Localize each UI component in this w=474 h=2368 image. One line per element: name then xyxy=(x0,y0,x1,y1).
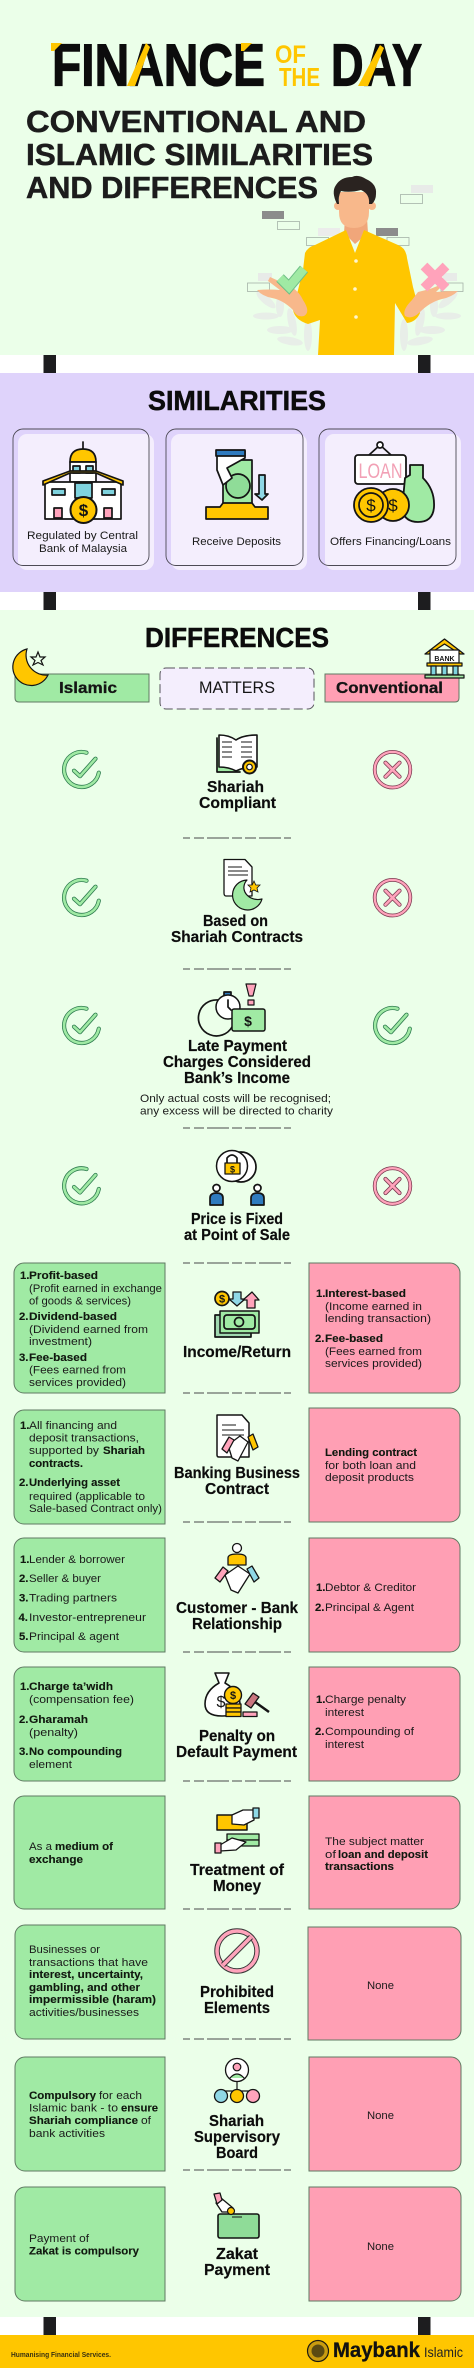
conventional cross xyxy=(375,880,410,916)
card: offers financing and loans: $ xyxy=(366,496,376,515)
icon: padlock in speech bubbles and two people xyxy=(210,1150,264,1205)
row: Late Payment Charges xyxy=(64,984,410,1118)
conventional panel: (Fees earned from xyxy=(325,1346,422,1358)
islamic panel: Investor-entrepreneur xyxy=(29,1612,146,1624)
column header: Islamic xyxy=(15,674,149,702)
label xyxy=(199,779,277,812)
main heading: AND DIFFERENCES xyxy=(26,170,318,205)
row: Banking Business Contract xyxy=(14,1408,460,1524)
label: Default Payment xyxy=(176,1744,298,1761)
conventional panel: loan and deposit xyxy=(338,1849,428,1861)
icon: bank building xyxy=(425,639,464,678)
label xyxy=(204,2246,271,2279)
conventional check xyxy=(375,1008,410,1043)
logo title: Finance of the Day: OF xyxy=(275,41,306,69)
card: offers financing and loans: LOAN xyxy=(358,460,402,483)
label: Charges Considered xyxy=(163,1054,311,1071)
islamic panel: Fee-based xyxy=(29,1352,87,1364)
islamic panel: transactions that have xyxy=(29,1957,148,1969)
conventional panel: of xyxy=(325,1849,337,1861)
heading: similarities: SIMILARITIES xyxy=(148,385,326,416)
islamic panel xyxy=(14,1796,165,1909)
label: Late Payment xyxy=(188,1038,288,1055)
islamic panel: 2. xyxy=(19,1311,28,1323)
conventional panel: deposit products xyxy=(325,1472,414,1484)
card: regulated by central bank: Bank of Malaysia xyxy=(39,543,128,555)
icon: clock, banknote and exclamation: $ xyxy=(244,1013,252,1029)
main heading xyxy=(26,104,373,205)
islamic panel: deposit transactions, xyxy=(29,1432,139,1444)
conventional panel: 1. xyxy=(316,1694,325,1706)
islamic panel: Islamic bank - to xyxy=(29,2102,118,2114)
conventional panel: Debtor & Creditor xyxy=(325,1582,416,1594)
label xyxy=(171,913,303,946)
islamic panel: element xyxy=(29,1759,73,1771)
islamic check xyxy=(64,752,99,787)
islamic panel: Principal & agent xyxy=(29,1631,120,1643)
icon: padlock in speech bubbles and two people: $ xyxy=(230,1164,235,1174)
label xyxy=(194,2113,280,2162)
islamic panel: (Dividend earned from xyxy=(29,1324,148,1336)
conventional panel: transactions xyxy=(325,1861,394,1873)
row: Customer - Bank Relationship xyxy=(14,1538,460,1652)
islamic panel: As a xyxy=(29,1841,53,1853)
icon: book with gear xyxy=(217,735,257,774)
islamic panel: No compounding xyxy=(29,1746,122,1758)
islamic panel: required (applicable to xyxy=(29,1491,145,1503)
conventional panel: 1. xyxy=(316,1288,325,1300)
islamic panel xyxy=(14,1410,165,1524)
islamic panel: (penalty) xyxy=(29,1727,78,1739)
islamic panel: of xyxy=(141,2115,152,2127)
footer logo: Maybank Islamic: Islamic xyxy=(424,2344,463,2360)
label: Shariah Contracts xyxy=(171,929,303,946)
conventional panel xyxy=(309,2187,461,2301)
conventional panel: The subject matter xyxy=(325,1836,424,1848)
conventional panel xyxy=(308,1927,461,2040)
label: Banking Business xyxy=(174,1465,300,1482)
conventional panel xyxy=(309,1796,460,1909)
card: offers financing and loans: Offers Financing/Loans xyxy=(330,536,451,548)
islamic panel xyxy=(15,2057,165,2171)
label: Penalty on xyxy=(199,1728,275,1745)
footer logo: Maybank Islamic: Maybank xyxy=(333,2339,420,2362)
conventional cross xyxy=(375,752,410,788)
label: Board xyxy=(216,2145,258,2162)
islamic panel: exchange xyxy=(29,1854,83,1866)
label: Based on xyxy=(203,913,268,930)
islamic panel: 5. xyxy=(19,1631,28,1643)
label: Money xyxy=(213,1878,261,1895)
icon: banknotes with arrows: $ xyxy=(219,1294,225,1306)
conventional panel: (Income earned in xyxy=(325,1301,422,1313)
islamic panel: services provided) xyxy=(29,1377,126,1389)
row: Zakat Payment xyxy=(15,2187,461,2301)
islamic panel xyxy=(15,2187,165,2301)
card: regulated by central bank xyxy=(13,429,154,570)
icon: money bag, coins and gavel: $ xyxy=(230,1690,236,1702)
islamic panel: (Profit earned in exchange xyxy=(29,1283,162,1295)
icon: clock, banknote and exclamation xyxy=(198,984,265,1036)
logo title: Finance of the Day: FINANCE xyxy=(52,32,265,98)
label xyxy=(174,1465,300,1498)
label: Treatment of xyxy=(190,1862,285,1879)
conventional panel: 1. xyxy=(316,1582,325,1594)
card: offers financing and loans xyxy=(319,429,461,570)
islamic panel xyxy=(15,1925,165,2039)
conventional panel: interest xyxy=(325,1707,365,1719)
label xyxy=(163,1038,311,1087)
heading: differences: DIFFERENCES xyxy=(145,622,329,653)
islamic panel: 1. xyxy=(20,1270,29,1282)
conventional panel xyxy=(309,2057,461,2171)
islamic panel: interest, uncertainty, xyxy=(29,1969,143,1981)
conventional panel: None xyxy=(367,2241,394,2253)
label: Income/Return xyxy=(183,1344,291,1361)
conventional panel: lending transaction) xyxy=(325,1313,431,1325)
islamic panel: Gharamah xyxy=(29,1714,88,1726)
note: any excess will be directed to charity xyxy=(140,1106,333,1118)
note xyxy=(140,1093,333,1118)
conventional panel: None xyxy=(367,2110,394,2122)
islamic panel: of goods & services) xyxy=(29,1296,131,1308)
label: Zakat xyxy=(216,2246,259,2263)
conventional panel: 2. xyxy=(315,1602,324,1614)
islamic panel: for each xyxy=(99,2090,142,2102)
islamic panel: Sale-based Contract only) xyxy=(29,1503,162,1515)
label xyxy=(176,1728,298,1761)
label: at Point of Sale xyxy=(184,1227,290,1244)
icon: money bag, coins and gavel: $ xyxy=(217,1694,226,1711)
islamic panel xyxy=(14,1667,165,1781)
islamic panel: bank activities xyxy=(29,2128,105,2140)
islamic panel: 1. xyxy=(20,1554,29,1566)
label: Customer - Bank xyxy=(176,1600,298,1617)
card: receive deposits xyxy=(166,429,307,570)
islamic panel: 4. xyxy=(18,1612,28,1624)
islamic panel: 3. xyxy=(19,1352,28,1364)
islamic panel: Profit-based xyxy=(29,1270,98,1282)
islamic panel: Compulsory xyxy=(29,2090,97,2102)
label: Relationship xyxy=(192,1616,282,1633)
islamic panel: Payment of xyxy=(29,2233,90,2245)
icon: hand dropping coin in box xyxy=(214,2193,259,2238)
conventional panel xyxy=(309,1263,460,1393)
islamic panel: contracts. xyxy=(29,1458,83,1470)
conventional panel: 2. xyxy=(315,1726,324,1738)
icon: document with crescent xyxy=(224,860,262,910)
icon: hands exchanging money xyxy=(215,1808,259,1853)
row: Shariah Supervisory Board xyxy=(15,2057,461,2171)
label: Prohibited xyxy=(200,1984,274,2001)
conventional panel: Lending contract xyxy=(325,1447,417,1459)
conventional panel: for both loan and xyxy=(325,1460,416,1472)
islamic panel: 2. xyxy=(19,1714,28,1726)
islamic panel: investment) xyxy=(29,1336,92,1348)
islamic panel: Underlying asset xyxy=(29,1477,120,1489)
islamic panel: gambling, and other xyxy=(29,1982,141,1994)
conventional panel: services provided) xyxy=(325,1358,422,1370)
icon: supervisory board org chart xyxy=(214,2058,260,2102)
column header: matters: MATTERS xyxy=(199,679,275,697)
islamic panel: Trading partners xyxy=(29,1592,117,1604)
label: Payment xyxy=(204,2262,271,2279)
label: Shariah xyxy=(207,779,264,796)
islamic panel: 2. xyxy=(19,1477,28,1489)
row: Treatment of Money xyxy=(14,1796,460,1909)
logo title: Finance of the Day: THE xyxy=(279,62,320,92)
icon: prohibited sign xyxy=(217,1931,257,1971)
conventional panel: Interest-based xyxy=(325,1288,406,1300)
islamic check xyxy=(64,1008,99,1043)
conventional panel xyxy=(309,1538,460,1652)
islamic panel: supported by xyxy=(29,1445,99,1457)
row: Income/Return xyxy=(14,1263,460,1393)
footer tagline: Humanising Financial Services. xyxy=(11,2350,111,2359)
conventional cross xyxy=(375,1168,410,1204)
footer logo: Maybank Islamic xyxy=(308,2339,463,2362)
islamic panel: ensure xyxy=(121,2102,158,2114)
islamic panel: Businesses or xyxy=(29,1944,100,1956)
islamic panel: Shariah compliance xyxy=(29,2115,138,2127)
islamic panel: Charge ta’widh xyxy=(29,1681,113,1693)
icon: person over handshake xyxy=(215,1544,259,1593)
card: offers financing and loans: $ xyxy=(388,496,398,515)
islamic panel: 1. xyxy=(20,1681,29,1693)
islamic panel: Shariah xyxy=(103,1445,145,1457)
islamic panel: Dividend-based xyxy=(29,1311,117,1323)
conventional panel: Compounding of xyxy=(325,1726,415,1738)
islamic panel: impermissible (haram) xyxy=(29,1994,156,2006)
icon: bank building: BANK xyxy=(434,656,455,663)
row: Price is Fixed xyxy=(64,1150,410,1244)
main heading: CONVENTIONAL AND xyxy=(26,104,366,139)
label xyxy=(190,1862,285,1895)
conventional panel xyxy=(309,1667,460,1781)
conventional panel: None xyxy=(367,1980,394,1992)
label xyxy=(200,1984,274,2017)
panel: similarities xyxy=(13,385,461,570)
label xyxy=(176,1600,298,1633)
label: Bank’s Income xyxy=(184,1070,290,1087)
islamic panel: Seller & buyer xyxy=(29,1573,101,1585)
islamic panel: 3. xyxy=(19,1746,28,1758)
islamic panel: 2. xyxy=(19,1573,28,1585)
conventional panel: Fee-based xyxy=(325,1333,383,1345)
islamic panel: medium of xyxy=(55,1841,113,1853)
islamic panel: activities/businesses xyxy=(29,2007,139,2019)
label: Contract xyxy=(205,1481,270,1498)
column header: conventional xyxy=(325,674,459,702)
islamic panel: All financing and xyxy=(29,1420,117,1432)
label xyxy=(184,1211,290,1244)
icon: crescent and star xyxy=(13,649,48,685)
label: Shariah xyxy=(209,2113,264,2130)
icon: banknotes with arrows xyxy=(215,1292,259,1337)
main heading: ISLAMIC SIMILARITIES xyxy=(26,137,373,172)
islamic panel: 1. xyxy=(20,1420,29,1432)
islamic panel: 3. xyxy=(19,1592,28,1604)
row: Based on Shariah Contracts xyxy=(64,860,410,946)
islamic check xyxy=(64,880,99,915)
islamic panel: Zakat is compulsory xyxy=(29,2246,140,2258)
column header: Islamic: Islamic xyxy=(59,680,117,697)
icon: money bag, coins and gavel xyxy=(205,1673,269,1716)
card: receive deposits: Receive Deposits xyxy=(192,536,281,548)
islamic panel: (compensation fee) xyxy=(29,1694,134,1706)
label: Supervisory xyxy=(194,2129,280,2146)
illustration: man weighing check and cross xyxy=(248,176,463,355)
column header: matters xyxy=(160,668,314,709)
row: Shariah Compliant xyxy=(64,735,410,812)
label: Compliant xyxy=(199,795,277,812)
logo title: Finance of the Day: DAY xyxy=(331,32,422,98)
islamic panel: (Fees earned from xyxy=(29,1364,126,1376)
conventional panel: Charge penalty xyxy=(325,1694,406,1706)
label: Price is Fixed xyxy=(191,1211,283,1228)
islamic panel: Lender & borrower xyxy=(29,1554,125,1566)
card: regulated by central bank: Regulated by Central xyxy=(27,530,138,542)
islamic check xyxy=(64,1168,99,1203)
islamic panel xyxy=(14,1263,165,1393)
conventional panel: Principal & Agent xyxy=(325,1602,415,1614)
conventional panel xyxy=(309,1408,460,1522)
icon: contract with handshake xyxy=(217,1415,258,1461)
label: Elements xyxy=(204,2000,270,2017)
conventional panel: 2. xyxy=(315,1333,324,1345)
row: Prohibited Elements xyxy=(15,1925,461,2040)
row: Penalty on Default Payment xyxy=(14,1667,460,1781)
conventional panel: interest xyxy=(325,1739,365,1751)
islamic panel xyxy=(14,1538,165,1652)
card: regulated by central bank: $ xyxy=(79,501,89,520)
column header: conventional: Conventional xyxy=(336,680,443,697)
note: Only actual costs will be recognised; xyxy=(140,1093,331,1105)
